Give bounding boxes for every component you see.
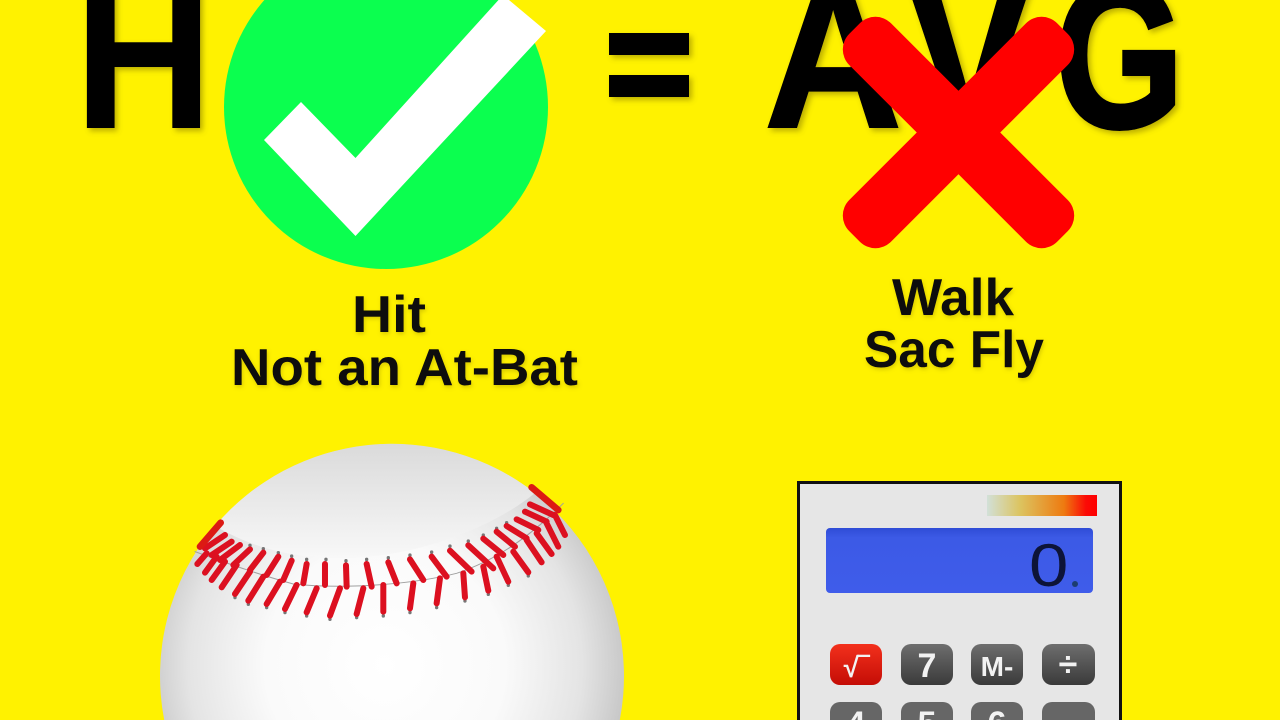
label: excluded plays [864, 269, 1044, 379]
keypad: ÷ [1059, 646, 1077, 684]
display reading: 0 [1029, 532, 1068, 599]
keypad: √‾ [844, 652, 871, 683]
keypad: M- [981, 651, 1013, 682]
label: excluded plays: Sac Fly [864, 321, 1044, 379]
label: excluded plays: Walk [892, 269, 1014, 327]
baseball seam ends [200, 487, 558, 547]
keypad [830, 644, 1095, 720]
colour strip [987, 495, 1097, 516]
heading letters AVG [764, 0, 1184, 172]
display [826, 528, 1093, 593]
icon: red cross [834, 8, 1083, 257]
calculator body [798, 482, 1120, 720]
baseball stitches [195, 487, 565, 619]
label: counts as a hit: Not an At-Bat [231, 339, 578, 397]
icon: baseball [160, 444, 624, 720]
display decimal point [1072, 581, 1078, 587]
label: counts as a hit [231, 286, 578, 397]
equals sign [609, 33, 689, 97]
icon: green check mark [224, 0, 548, 269]
label: counts as a hit: Hit [352, 286, 426, 344]
keypad: 7 [918, 647, 936, 685]
icon: calculator [798, 482, 1120, 720]
